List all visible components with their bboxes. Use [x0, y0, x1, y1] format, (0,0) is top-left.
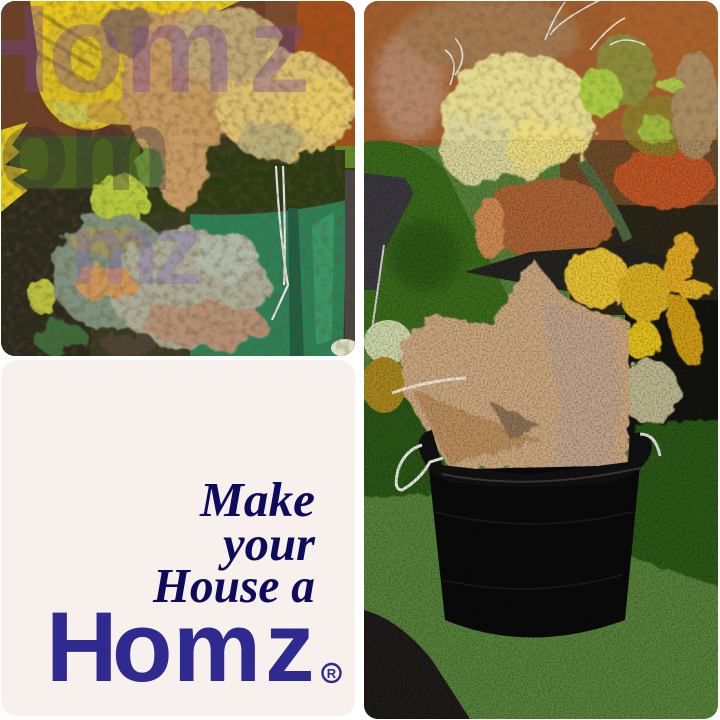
black bucket	[418, 430, 652, 638]
translucent logo overlay: mz	[70, 194, 202, 306]
large dried tan leaf	[400, 258, 630, 468]
registered mark	[322, 664, 340, 682]
moss mound	[364, 141, 510, 330]
tagline: House a: House a	[152, 558, 315, 613]
yellow spiky petals	[1, 122, 28, 212]
white leaf strip	[392, 378, 466, 393]
slate stone bottom-left	[364, 610, 470, 719]
panel: right bucket photo	[350, 0, 720, 719]
green stem	[580, 160, 628, 240]
white ribbons	[272, 166, 288, 320]
registered mark: R	[327, 666, 337, 681]
orange dried flower centre	[475, 178, 616, 260]
lichen flower cluster	[34, 214, 268, 356]
background wall	[1, 1, 355, 356]
white fibres on hydrangea	[445, 0, 645, 85]
wall backdrop	[364, 0, 718, 210]
pale blossom right	[620, 360, 680, 424]
pale yellow hydrangea	[442, 53, 596, 186]
thin wire	[372, 245, 384, 330]
panel: brand message card	[1, 360, 355, 716]
hedge blocks	[350, 400, 720, 590]
pale leaf corner	[331, 339, 355, 356]
sunflower fan	[30, 1, 240, 130]
green bucket	[190, 170, 355, 356]
panel: top-left flower photo with logo overlay	[0, 0, 359, 357]
orange dried flower right	[595, 34, 719, 209]
moss lower shading	[389, 219, 461, 291]
slate leaf	[364, 173, 414, 290]
lime green flowers	[28, 148, 164, 314]
yellow orchid	[565, 229, 713, 371]
pale blossom left	[362, 320, 412, 413]
dark back area	[570, 205, 718, 315]
logo wordmark: Homz: Homz	[46, 591, 314, 702]
tagline: your: your	[218, 516, 316, 571]
rope handle left	[396, 445, 443, 490]
translucent logo overlay: om	[0, 84, 173, 216]
translucent logo overlay	[1, 6, 306, 284]
rope handle right	[640, 434, 660, 456]
lime accents	[578, 68, 684, 144]
tagline: Make: Make	[199, 472, 315, 527]
black leaf	[465, 247, 598, 292]
dried tan flower cluster	[102, 2, 355, 207]
